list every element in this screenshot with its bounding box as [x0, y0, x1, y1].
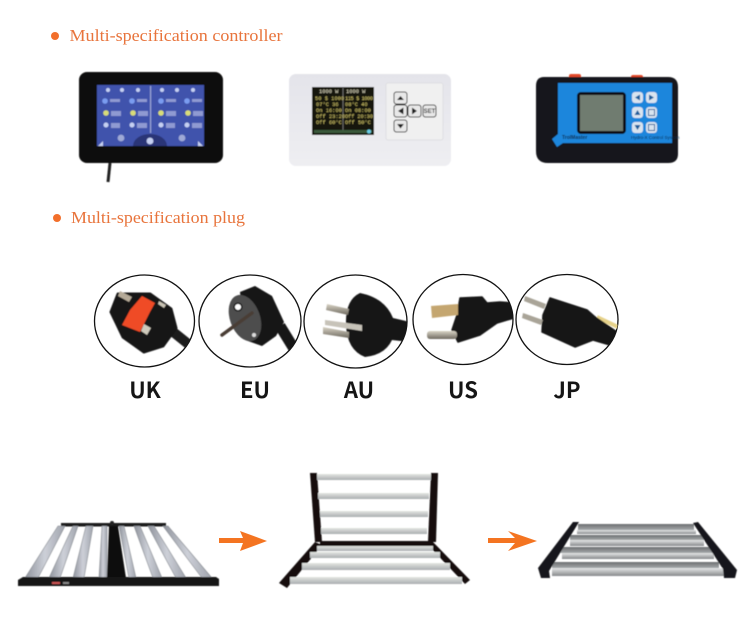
controller screen: Off 20:30	[345, 114, 373, 120]
controller: touchscreen	[79, 72, 223, 182]
controller screen: 07°C 36	[316, 102, 339, 108]
controller screen: 08°C 40	[345, 102, 368, 108]
plug: US: US	[448, 373, 478, 405]
controller screen: 1000 W	[319, 89, 339, 95]
plug: EU	[199, 275, 301, 405]
controller: blue panel	[536, 74, 680, 163]
plug: EU: EU	[240, 373, 270, 405]
controller screen: Off 23:20	[316, 114, 345, 120]
plug: JP	[516, 274, 620, 405]
controller screen: 1000 W	[346, 89, 366, 95]
plug: UK: UK	[129, 373, 162, 405]
controller: white panel	[289, 74, 451, 166]
button panel: SET	[424, 109, 436, 115]
controller screen: On 08:00	[345, 108, 371, 114]
controller screen: On 16:00	[316, 108, 342, 114]
controller: blue panel: Hydro-X Control System	[631, 135, 680, 140]
controller screen: 115 $ 1000	[345, 96, 373, 102]
controller screen: 50 $ 1000	[315, 96, 344, 102]
plug: JP: JP	[553, 373, 581, 405]
heading: controller: Multi-specification controller	[70, 26, 283, 45]
plug: UK	[94, 275, 194, 405]
controller screen	[312, 87, 374, 135]
plug: AU	[304, 275, 410, 405]
controller screen: Off 50°C	[345, 120, 371, 126]
arrow: second fold	[488, 531, 537, 551]
plug: AU: AU	[343, 373, 374, 405]
controller: blue panel: TrolMaster	[562, 135, 587, 141]
light: half folded	[279, 473, 470, 588]
light: fully unfolded	[18, 521, 219, 586]
light: fully folded	[538, 522, 737, 578]
arrow: first fold	[219, 531, 267, 551]
controller screen: Off 60°C	[316, 120, 342, 126]
heading: plug: Multi-specification plug	[71, 208, 246, 227]
plug: US	[413, 274, 514, 405]
button panel	[386, 83, 443, 140]
